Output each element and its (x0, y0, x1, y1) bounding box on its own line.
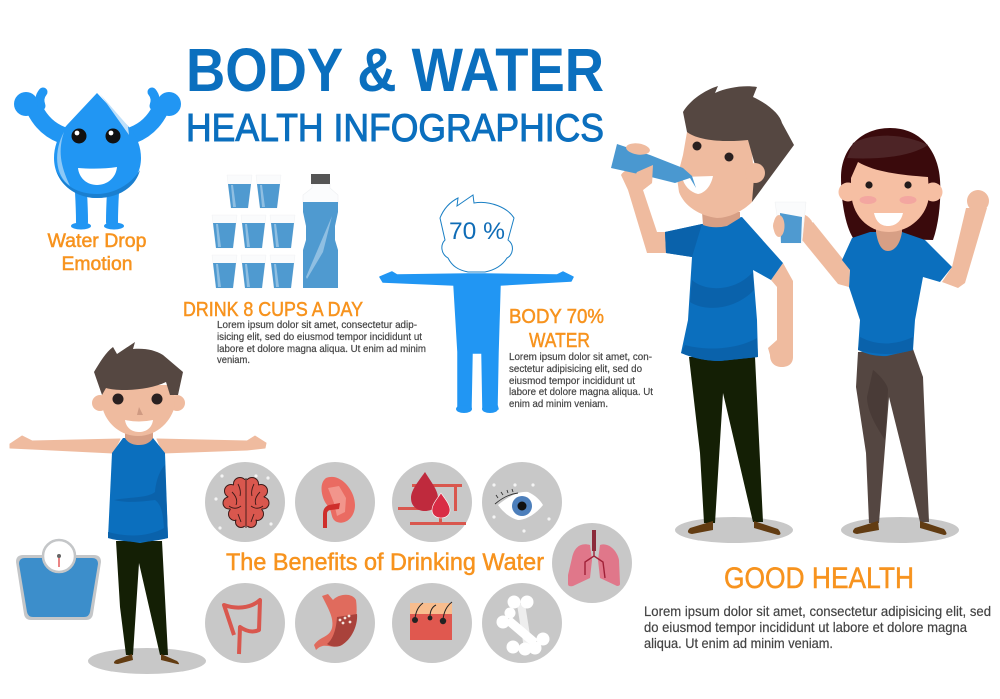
icon: skin (392, 583, 472, 663)
text: body water description: sectetur adipisicing elit, sed do (509, 363, 642, 375)
title: BODY & WATER (186, 36, 604, 104)
icon: intestine (205, 583, 285, 663)
body 70 percent figure: 70 % (449, 218, 505, 245)
text: drink 8 cups description: labore et dolore magna aliqua. Ut enim ad minim (217, 343, 426, 355)
heading: benefits of drinking water: The Benefits of Drinking Water (226, 549, 544, 576)
water bottle (303, 174, 338, 288)
icon: brain (205, 462, 285, 542)
body 70 percent figure (380, 195, 573, 413)
icon: blood drops (392, 462, 472, 542)
icon: lungs (552, 523, 632, 603)
water drop label: Water Drop (48, 231, 146, 252)
title: HEALTH INFOGRAPHICS (186, 107, 604, 150)
text: good health description: aliqua. Ut enim ad minim veniam. (644, 635, 833, 651)
text: drink 8 cups description: veniam. (217, 354, 250, 366)
heading: drink 8 cups: DRINK 8 CUPS A DAY (183, 299, 363, 321)
text: good health description (644, 603, 991, 651)
bathroom scale (16, 540, 101, 620)
heading: body 70 percent water: BODY 70% (509, 306, 604, 328)
text: drink 8 cups description (217, 319, 426, 366)
text: body water description: enim ad minim veniam. (509, 398, 608, 410)
icon: stomach (295, 583, 375, 663)
man drinking water (611, 86, 794, 543)
heading: body 70 percent water: WATER (529, 330, 590, 352)
icon: kidney (295, 462, 375, 542)
text: drink 8 cups description: Lorem ipsum dolor sit amet, consectetur adip- (217, 319, 417, 331)
text: body water description: eiusmod tempor incididunt ut (509, 375, 635, 387)
text: body water description: Lorem ipsum dolor sit amet, con- (509, 351, 652, 363)
text: body water description: labore et dolore magna aliqua. Ut (509, 386, 653, 398)
heading: body 70 percent water (509, 306, 604, 352)
title (186, 36, 604, 150)
icon: bones (482, 583, 562, 663)
water drop mascot (14, 92, 181, 230)
text: good health description: do eiusmod tempor incididunt ut labore et dolore magna (644, 619, 967, 635)
icon: eye (482, 462, 562, 542)
eight cups of water (212, 175, 295, 288)
heading: good health: GOOD HEALTH (724, 562, 914, 595)
text: body water description (509, 351, 653, 410)
text: drink 8 cups description: isicing elit, sed do eiusmod tempor incididunt ut (217, 331, 422, 343)
boy with arms out (10, 342, 266, 674)
water drop label: Emotion (62, 254, 132, 275)
woman holding glass (773, 128, 989, 543)
water drop label (48, 231, 146, 275)
